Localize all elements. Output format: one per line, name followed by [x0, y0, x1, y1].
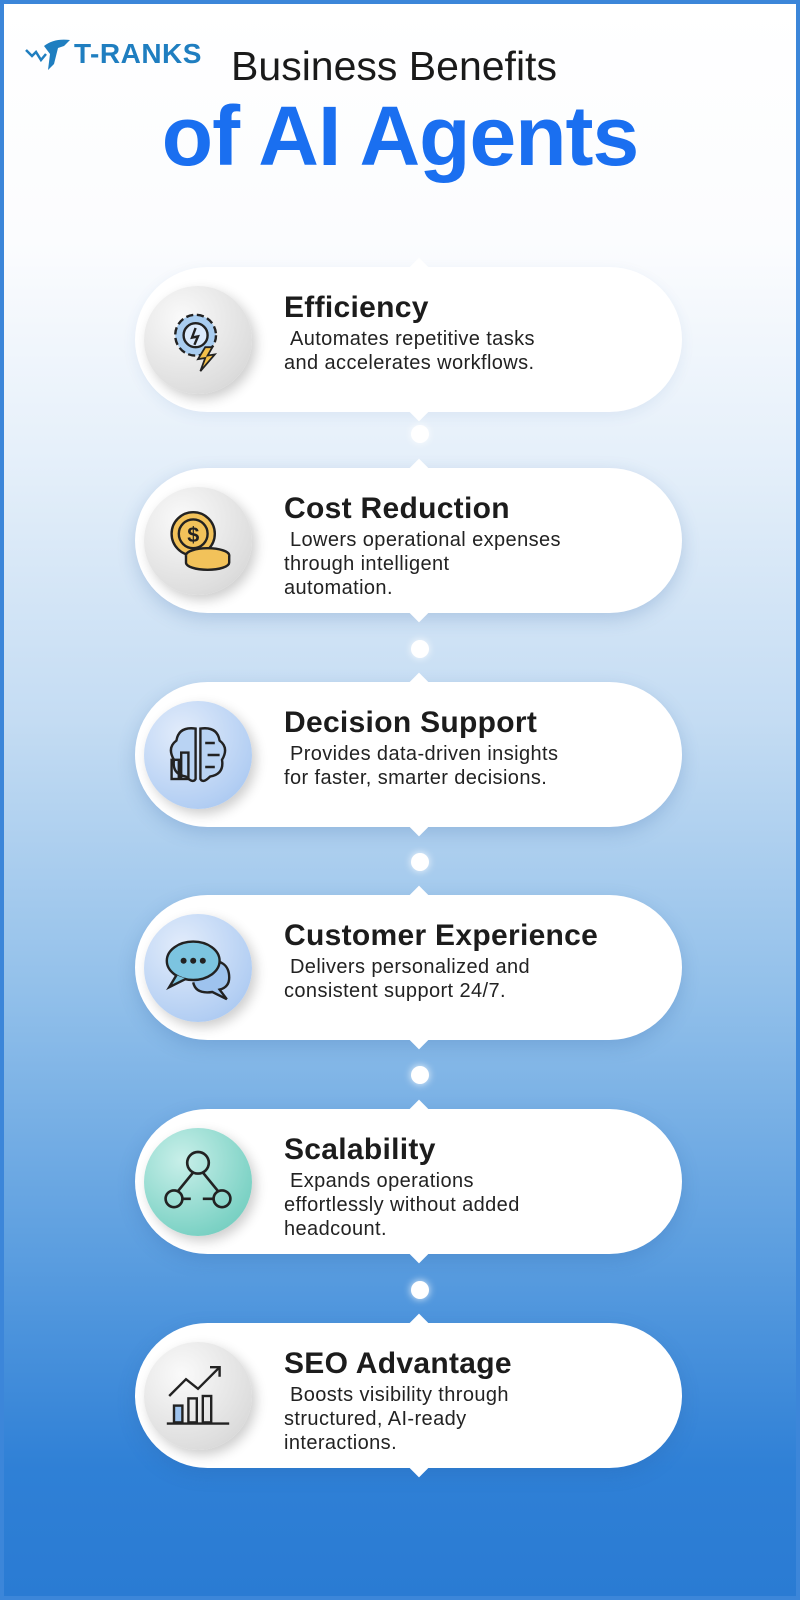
text: scalability: effortlessly without added — [284, 1194, 520, 1216]
text: efficiency: Efficiency — [284, 291, 429, 324]
text: efficiency: Automates repetitive tasks — [290, 328, 535, 350]
text: seo advantage: structured, AI-ready — [284, 1408, 467, 1430]
text: customer experience: Delivers personalized and — [290, 956, 530, 978]
text: cost reduction: automation. — [284, 577, 393, 599]
icon: network nodes — [144, 1128, 252, 1236]
icon: coins — [144, 487, 252, 595]
text: decision support — [284, 706, 558, 789]
icon: gear — [144, 286, 252, 394]
logo: T-RANKS — [74, 38, 202, 69]
text: seo advantage: SEO Advantage — [284, 1347, 512, 1380]
text: scalability: headcount. — [284, 1218, 387, 1240]
card: scalability — [135, 1109, 682, 1254]
text: seo advantage: Boosts visibility through — [290, 1384, 509, 1406]
text: customer experience: consistent support 24/7. — [284, 980, 506, 1002]
card: decision support — [135, 682, 682, 827]
text: scalability — [284, 1133, 520, 1240]
text: cost reduction — [284, 492, 561, 599]
text: seo advantage — [284, 1347, 512, 1454]
icon: brain — [144, 701, 252, 809]
text: decision support: for faster, smarter decisions. — [284, 767, 547, 789]
text: cost reduction: through intelligent — [284, 553, 450, 575]
title — [162, 43, 638, 183]
text: cost reduction: Lowers operational expenses — [290, 529, 561, 551]
text: customer experience: Customer Experience — [284, 919, 598, 952]
text: decision support: Decision Support — [284, 706, 537, 739]
text: customer experience — [284, 919, 598, 1002]
icon: chat bubbles — [144, 914, 252, 1022]
icon: growth chart — [144, 1342, 252, 1450]
card: customer experience — [135, 895, 682, 1040]
title: Business Benefits — [231, 43, 557, 89]
text: cost reduction: Cost Reduction — [284, 492, 510, 525]
text: seo advantage: interactions. — [284, 1432, 397, 1454]
text: efficiency — [284, 291, 535, 374]
card: efficiency — [135, 267, 682, 412]
connector dots — [406, 425, 434, 1304]
text: scalability: Expands operations — [290, 1170, 474, 1192]
text: efficiency: and accelerates workflows. — [284, 352, 535, 374]
text: scalability: Scalability — [284, 1133, 436, 1166]
card: cost reduction — [135, 468, 682, 613]
icon: coins: $ — [187, 522, 199, 547]
text: decision support: Provides data-driven insights — [290, 743, 558, 765]
title: of AI Agents — [162, 89, 638, 183]
card: seo advantage — [135, 1323, 682, 1468]
